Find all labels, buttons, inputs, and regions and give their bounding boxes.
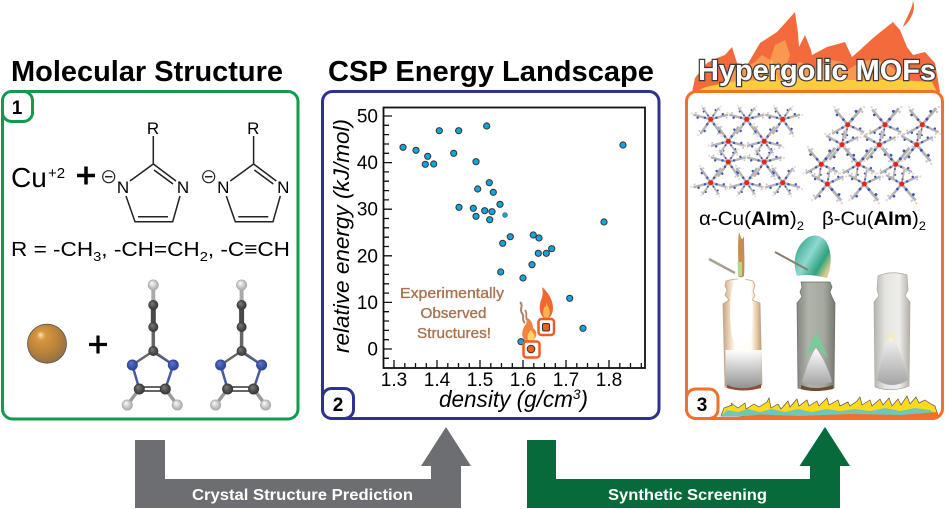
title: Molecular Structure: Molecular Structure bbox=[11, 56, 283, 88]
x axis labels: 1.3 bbox=[381, 370, 407, 391]
text: copper ion: +2 bbox=[48, 165, 65, 182]
icon: plus sign bbox=[77, 166, 95, 184]
label: beta copper: β-Cu(AIm) bbox=[822, 209, 918, 230]
x axis title: density (g/cm bbox=[439, 386, 576, 412]
callout: experimentally observed structures: Experimentally bbox=[400, 285, 505, 302]
x axis labels: 1.4 bbox=[424, 370, 451, 391]
x axis labels: 1.7 bbox=[553, 370, 579, 391]
panel: hypergolic MOFs bbox=[686, 92, 943, 419]
arrow: synthetic screening: Synthetic Screening bbox=[608, 487, 767, 504]
x axis title: 3 bbox=[573, 386, 581, 402]
y axis labels: 20 bbox=[357, 246, 378, 267]
x axis labels: 1.6 bbox=[510, 370, 536, 391]
crystal structure beta bbox=[801, 103, 943, 206]
title: Hypergolic MOFs: Hypergolic MOFs bbox=[698, 55, 936, 87]
label: alpha copper: α-Cu(AIm) bbox=[699, 209, 796, 230]
imidazolate ligand left bbox=[103, 119, 189, 222]
panel: CSP energy landscape bbox=[322, 92, 659, 418]
badge: 2 bbox=[322, 388, 354, 418]
callout: experimentally observed structures: Observed bbox=[420, 305, 486, 322]
text: copper ion: Cu bbox=[11, 162, 47, 193]
highlighted structure alpha bbox=[524, 342, 540, 358]
arrow: crystal structure prediction: Crystal Structure Prediction bbox=[192, 487, 413, 504]
y axis labels: 50 bbox=[357, 106, 378, 128]
label: beta copper: 2 bbox=[919, 219, 926, 233]
callout: experimentally observed structures bbox=[400, 285, 505, 342]
title: CSP Energy Landscape: CSP Energy Landscape bbox=[328, 56, 654, 88]
label: alpha copper: 2 bbox=[797, 219, 804, 233]
y axis labels: 40 bbox=[357, 153, 378, 174]
arrow: synthetic screening bbox=[527, 427, 850, 508]
scatter chart bbox=[329, 106, 645, 412]
crystal structure alpha bbox=[689, 104, 804, 198]
ground flames strip bbox=[720, 396, 938, 419]
highlighted structure beta bbox=[538, 319, 554, 335]
x axis labels: 1.8 bbox=[596, 370, 622, 391]
icon: plus sign bbox=[89, 336, 107, 354]
y axis labels: 10 bbox=[357, 293, 378, 314]
arrow: crystal structure prediction bbox=[135, 427, 471, 508]
y axis labels bbox=[357, 106, 378, 360]
icon: copper atom bbox=[28, 324, 66, 363]
data points bbox=[400, 123, 626, 345]
badge: 3: 3 bbox=[697, 395, 707, 416]
imidazolate ligand right bbox=[203, 119, 289, 222]
callout: experimentally observed structures: Structures! bbox=[417, 325, 491, 342]
badge: 1: 1 bbox=[12, 98, 23, 119]
imidazolate ligand left: N bbox=[117, 178, 129, 197]
x axis labels bbox=[381, 370, 622, 391]
icon: smoke and small flame bbox=[520, 302, 536, 341]
ball and stick ligand right bbox=[210, 280, 271, 410]
ball and stick ligand left bbox=[122, 280, 183, 410]
x axis title: ) bbox=[578, 386, 588, 412]
icon: large flame bbox=[540, 287, 553, 318]
text: R substituents: 3 bbox=[93, 249, 101, 264]
x axis labels: 1.5 bbox=[467, 370, 493, 391]
imidazolate ligand right: R bbox=[247, 119, 259, 138]
badge: 3 bbox=[686, 389, 718, 418]
imidazolate ligand right: N bbox=[277, 178, 289, 197]
imidazolate ligand left: R bbox=[147, 119, 159, 138]
text: R substituents: R = -CH bbox=[11, 239, 84, 261]
vial: burning alpha bbox=[709, 232, 762, 390]
y axis labels: 30 bbox=[357, 200, 378, 221]
vial: burning beta with green flame bbox=[775, 236, 835, 391]
text: R substituents: 2 bbox=[200, 249, 208, 264]
text: copper ion bbox=[11, 162, 65, 193]
text: R substituents: , -CH=CH bbox=[101, 239, 200, 261]
vial: unburned bbox=[874, 273, 910, 390]
header flames bbox=[692, 1, 940, 92]
badge: 2: 2 bbox=[333, 395, 343, 416]
imidazolate ligand left: N bbox=[177, 178, 189, 197]
y axis title: relative energy (kJ/mol) bbox=[329, 119, 354, 353]
y axis labels: 0 bbox=[367, 340, 378, 360]
imidazolate ligand right: N bbox=[217, 178, 229, 197]
panel: molecular structure bbox=[2, 92, 298, 419]
text: R substituents: , -C≡CH bbox=[208, 239, 290, 261]
badge: 1 bbox=[2, 92, 32, 122]
